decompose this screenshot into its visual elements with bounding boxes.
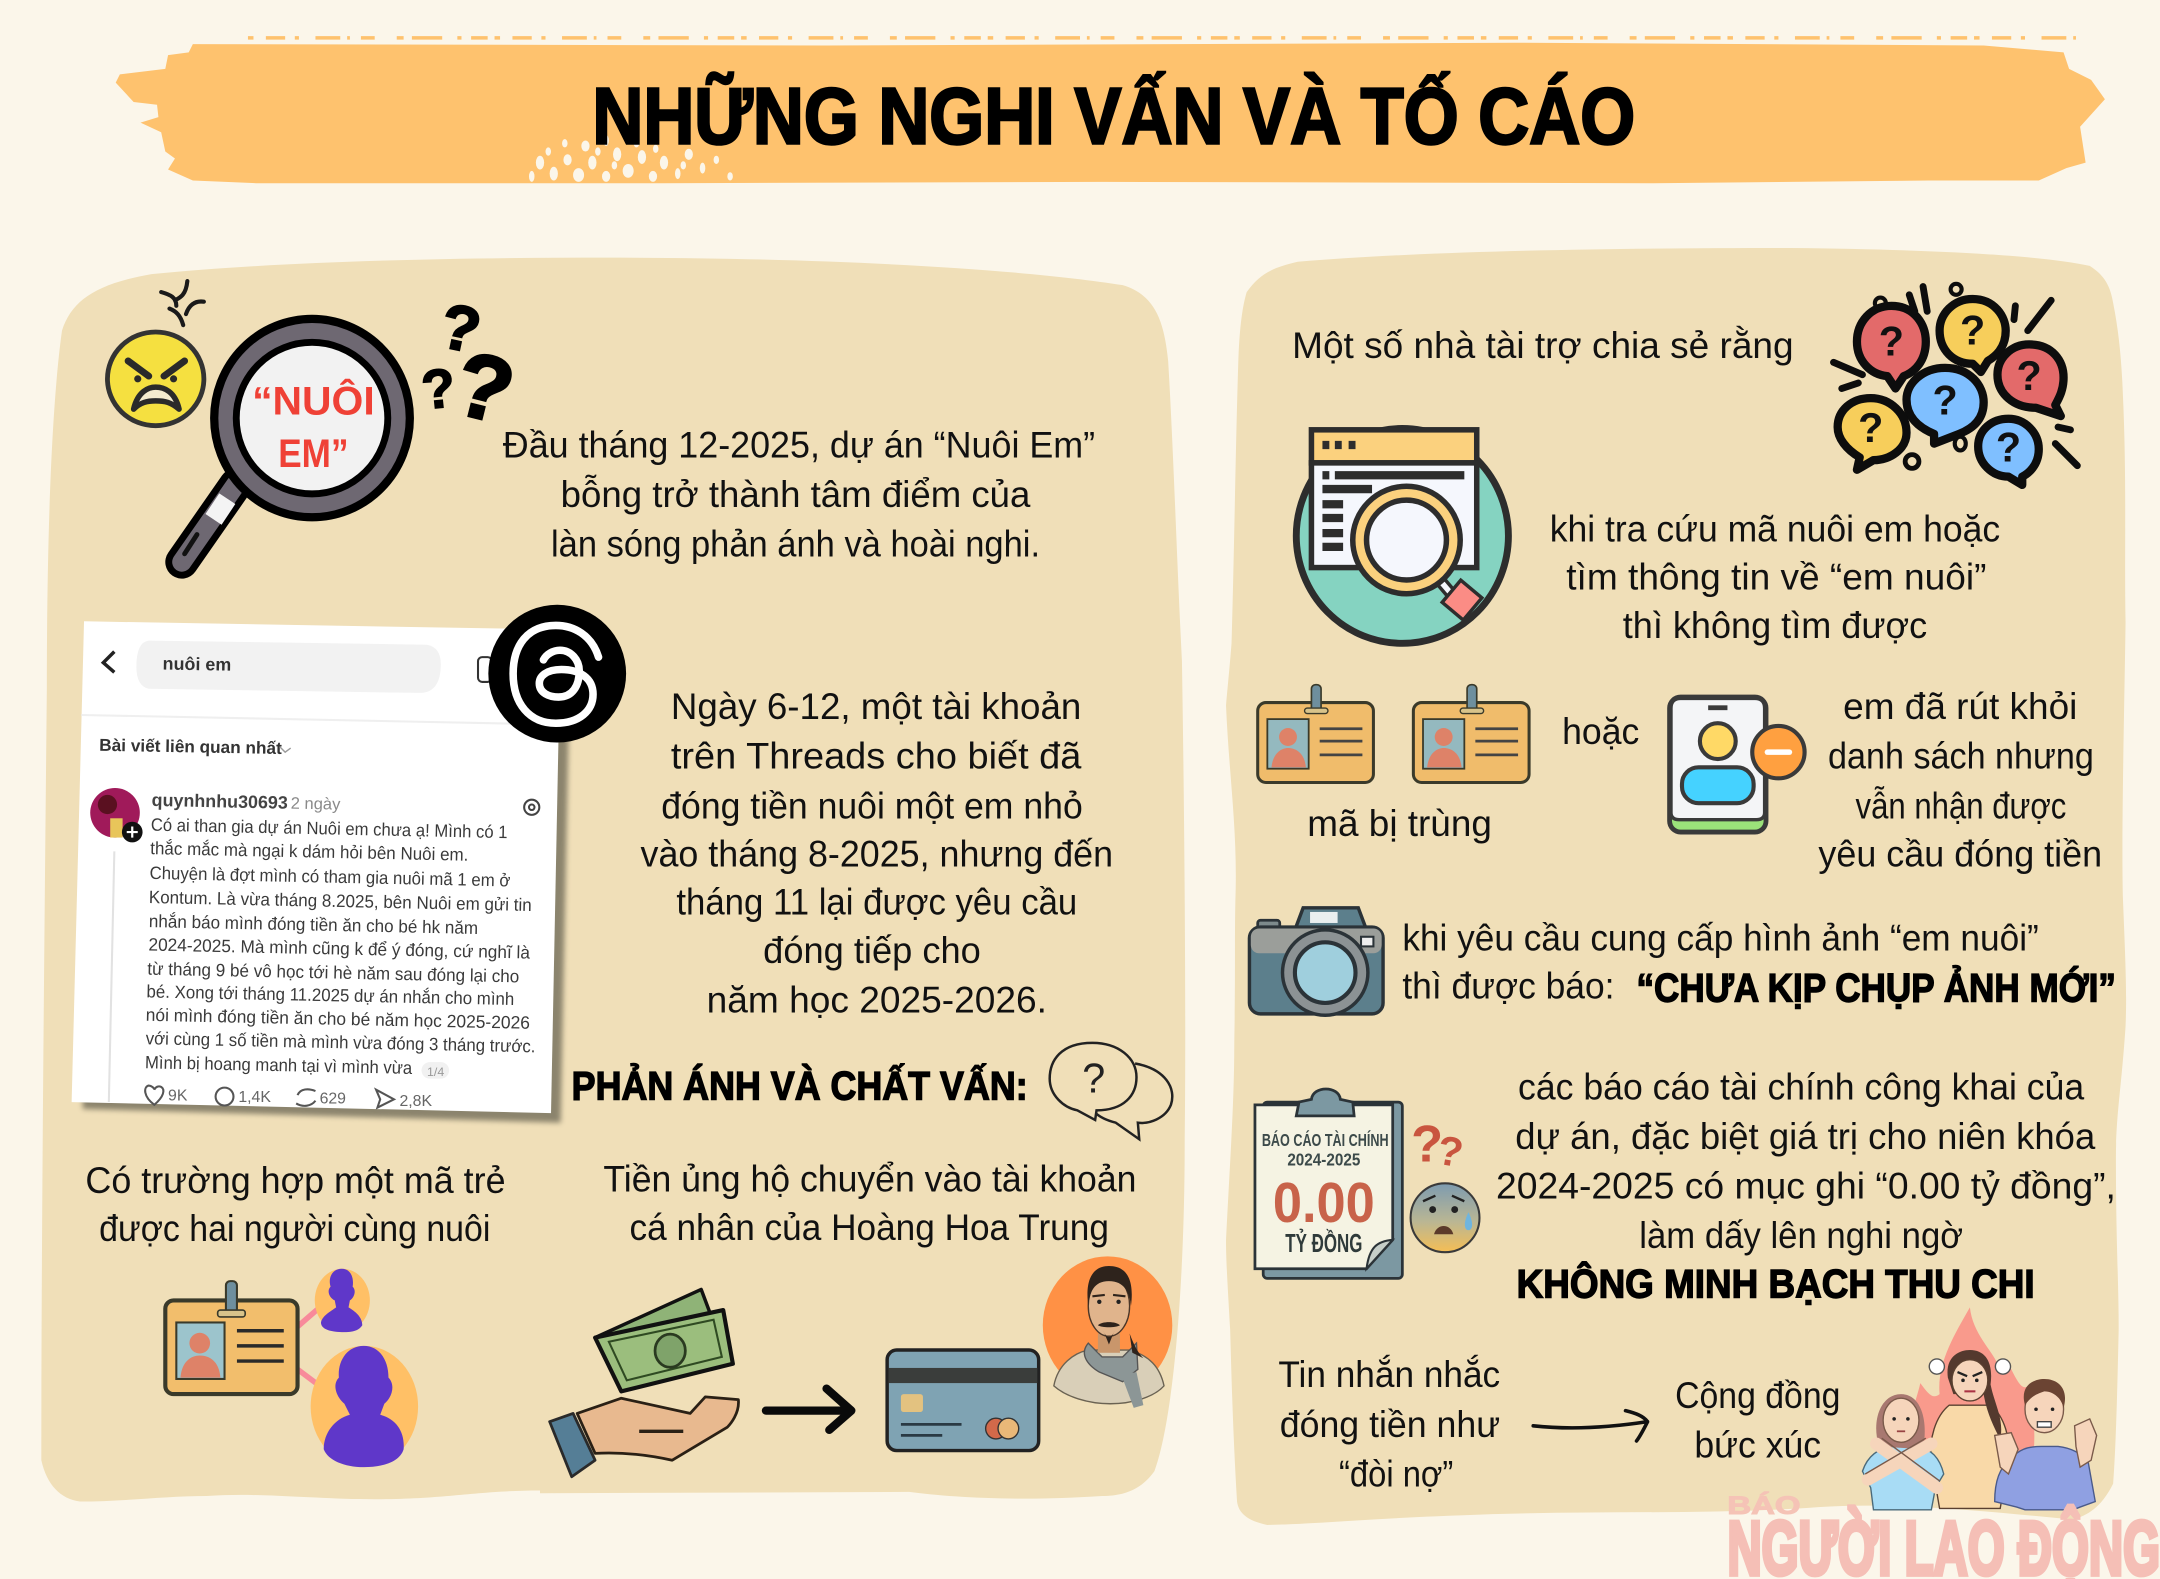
icon: id card two bbox=[1413, 685, 1529, 782]
text: duplicate code: mã bị trùng bbox=[1307, 802, 1492, 844]
bubble question marks and sparks: ? bbox=[1858, 405, 1883, 451]
icon: red question marks: ? bbox=[1434, 1127, 1467, 1176]
icon: question marks: ? bbox=[445, 333, 523, 444]
post text: bé. Xong tới tháng 11.2025 dự án nhắn cho mình bbox=[146, 980, 515, 1009]
post text: Chuyện là đợt mình có tham gia nuôi mã 1 em ở bbox=[149, 863, 511, 890]
text block: reminder messages: đóng tiền như bbox=[1280, 1403, 1500, 1445]
icon: financial report bbox=[1255, 1089, 1402, 1278]
text block: intro: bỗng trở thành tâm điểm của bbox=[561, 473, 1031, 515]
text block: personal account: cá nhân của Hoàng Hoa Trung bbox=[630, 1206, 1109, 1248]
post stats: 629 bbox=[320, 1090, 346, 1107]
text block: financial reports: dự án, đặc biệt giá trị cho niên khóa bbox=[1515, 1115, 2096, 1157]
text block: intro bbox=[503, 423, 1095, 565]
text: or: hoặc bbox=[1562, 710, 1639, 752]
icon: search window bbox=[1296, 428, 1508, 643]
post text: thắc mắc mà ngại k dám hỏi bên Nuôi em. bbox=[150, 837, 469, 865]
heading: complaints: PHẢN ÁNH VÀ CHẤT VẤN: bbox=[572, 1062, 1028, 1108]
text block: reminder messages: Tin nhắn nhắc bbox=[1278, 1353, 1500, 1395]
icon: magnifying glass bbox=[182, 319, 410, 562]
post stats: 9K bbox=[168, 1088, 188, 1105]
panel: right bbox=[1226, 248, 2126, 1525]
text block: duplicate code: được hai người cùng nuôi bbox=[99, 1207, 490, 1249]
screenshot: threads post: Bài viết liên quan nhất bbox=[99, 735, 282, 758]
icon: id card with two sponsors bbox=[165, 1269, 418, 1467]
text block: intro: làn sóng phản ánh và hoài nghi. bbox=[551, 523, 1040, 565]
post text: 2024-2025. Mà mình cũng k để ý đóng, cứ nghĩ là bbox=[148, 935, 530, 963]
icon: worried face bbox=[1411, 1183, 1479, 1252]
bubble question marks and sparks: ? bbox=[2017, 353, 2042, 399]
report text: BÁO CÁO TÀI CHÍNH bbox=[1262, 1129, 1389, 1150]
post text: Mình bị hoang manh tại vì mình vừa bbox=[145, 1052, 412, 1078]
text block: financial reports: KHÔNG MINH BẠCH THU CHI bbox=[1517, 1261, 2035, 1307]
text block: lookup fails bbox=[1550, 507, 2000, 646]
magnifier label bbox=[252, 378, 375, 476]
post text: Có ai than gia dự án Nuôi em chưa ạ! Mình có 1 bbox=[151, 815, 508, 842]
text block: threads account: năm học 2025-2026. bbox=[707, 979, 1047, 1021]
text: sponsors share: Một số nhà tài trợ chia sẻ rằng bbox=[1292, 324, 1794, 366]
icon: angry face bbox=[107, 281, 204, 426]
text block: withdrawn: vẫn nhận được bbox=[1856, 784, 2066, 826]
center woman bbox=[1929, 1350, 2011, 1508]
icon: question marks: ? bbox=[434, 291, 487, 367]
watermark: BÁO bbox=[1727, 1492, 1800, 1520]
post text: với cùng 1 số tiền mà mình vừa đóng 3 tháng trước. bbox=[146, 1028, 536, 1056]
screenshot: threads post: nuôi em bbox=[162, 654, 231, 675]
text block: withdrawn: danh sách nhưng bbox=[1828, 735, 2094, 777]
heading: NHỮNG NGHI VẤN VÀ TỐ CÁO bbox=[592, 71, 1635, 160]
icon: red question marks: ? bbox=[1411, 1115, 1443, 1173]
text block: photo request: khi yêu cầu cung cấp hình ảnh “em nuôi” bbox=[1402, 917, 2039, 959]
icon: threads logo bbox=[488, 605, 626, 743]
text block: lookup fails: thì không tìm được bbox=[1623, 604, 1927, 646]
text block: reminder messages: “đòi nợ” bbox=[1339, 1452, 1453, 1494]
text block: financial reports: các báo cáo tài chính công khai của bbox=[1518, 1065, 2085, 1107]
bubble question marks and sparks bbox=[1834, 284, 2077, 471]
left woman bbox=[1862, 1394, 1944, 1510]
text block: financial reports: 2024-2025 có mục ghi “0.00 tỷ đồng”, bbox=[1496, 1164, 2116, 1206]
post stats: 1,4K bbox=[238, 1089, 271, 1106]
report text bbox=[1262, 1129, 1389, 1258]
bubble question marks and sparks: ? bbox=[1960, 307, 1985, 353]
text block: threads account: tháng 11 lại được yêu cầu bbox=[676, 881, 1077, 923]
text block: lookup fails: khi tra cứu mã nuôi em hoặc bbox=[1550, 507, 2000, 549]
icon: question marks bbox=[418, 291, 523, 444]
bubble question marks and sparks: ? bbox=[1996, 425, 2021, 471]
post text: nói mình đóng tiền ăn cho bé năm học 2025-2026 bbox=[146, 1005, 530, 1033]
text block: photo request: thì được báo: bbox=[1402, 965, 1614, 1007]
icon: red question marks bbox=[1411, 1115, 1467, 1176]
report text: TỶ ĐỒNG bbox=[1285, 1228, 1362, 1258]
icon: hand with money bbox=[550, 1289, 739, 1477]
report text: 2024-2025 bbox=[1287, 1149, 1361, 1169]
text block: photo request bbox=[1402, 917, 2116, 1011]
text block: financial reports bbox=[1496, 1065, 2116, 1307]
text block: reminder messages bbox=[1278, 1353, 1500, 1494]
text block: duplicate code: Có trường hợp một mã trẻ bbox=[85, 1159, 506, 1201]
illustration: angry people bbox=[1862, 1307, 2097, 1510]
text block: withdrawn: em đã rút khỏi bbox=[1843, 685, 2077, 727]
text: community upset bbox=[1675, 1374, 1840, 1465]
screenshot: threads post bbox=[72, 621, 570, 1123]
text block: lookup fails: tìm thông tin về “em nuôi” bbox=[1566, 556, 1986, 598]
icon: speech bubbles: ? bbox=[1082, 1055, 1105, 1101]
post stats bbox=[145, 1086, 432, 1110]
text block: threads account: trên Threads cho biết đã bbox=[671, 735, 1082, 777]
icon: phone removing contact bbox=[1670, 697, 1805, 832]
text block: threads account: Ngày 6-12, một tài khoản bbox=[671, 685, 1081, 727]
icon: camera bbox=[1249, 908, 1383, 1015]
bubble question marks and sparks: ? bbox=[1879, 318, 1904, 364]
icon: question bubbles bbox=[1838, 299, 2064, 485]
text block: withdrawn bbox=[1818, 685, 2102, 875]
post stats: 2,8K bbox=[399, 1093, 432, 1110]
screenshot: threads post: 2 ngày bbox=[291, 794, 341, 814]
text: community upset: bức xúc bbox=[1694, 1423, 1821, 1465]
icon: id card one bbox=[1258, 685, 1373, 782]
text: community upset: Cộng đồng bbox=[1675, 1374, 1840, 1416]
post text: nhắn báo mình đóng tiền ăn cho bé hk năm bbox=[149, 910, 478, 938]
arrow: money to account bbox=[766, 1389, 851, 1430]
icon: bank card bbox=[887, 1350, 1039, 1451]
portrait: Hoàng Hoa Trung bbox=[1043, 1256, 1172, 1408]
title banner bbox=[116, 38, 2105, 183]
text block: withdrawn: yêu cầu đóng tiền bbox=[1818, 833, 2102, 875]
panel: left bbox=[41, 258, 1185, 1502]
magnifier label: “NUÔI bbox=[252, 378, 375, 424]
text block: financial reports: làm dấy lên nghi ngờ bbox=[1639, 1214, 1963, 1256]
text block: duplicate code bbox=[85, 1159, 506, 1249]
right man bbox=[1995, 1379, 2097, 1510]
screenshot: threads post: quynhnhu30693 bbox=[151, 790, 288, 813]
arrow: reminders to outrage bbox=[1533, 1411, 1648, 1441]
report text: 0.00 bbox=[1273, 1171, 1375, 1234]
post text: Kontum. Là vừa tháng 8.2025, bên Nuôi em gửi tin bbox=[149, 887, 532, 915]
magnifier label: EM” bbox=[278, 432, 349, 476]
post text bbox=[145, 815, 536, 1079]
text block: threads account: đóng tiền nuôi một em nhỏ bbox=[661, 784, 1083, 826]
text block: intro: Đầu tháng 12-2025, dự án “Nuôi Em” bbox=[503, 423, 1095, 465]
icon: speech bubbles bbox=[1050, 1043, 1172, 1139]
text block: threads account: đóng tiếp cho bbox=[763, 929, 981, 971]
post text: từ tháng 9 bé vô học tới hè năm sau đóng lại cho bbox=[147, 959, 519, 986]
text block: personal account: Tiền ủng hộ chuyển vào tài khoản bbox=[603, 1158, 1136, 1200]
text block: threads account: vào tháng 8-2025, nhưng đến bbox=[641, 833, 1113, 875]
icon: question marks: ? bbox=[418, 356, 458, 421]
bubble question marks and sparks: ? bbox=[1932, 378, 1958, 424]
text block: personal account bbox=[603, 1158, 1136, 1248]
post text: 1/4 bbox=[427, 1065, 444, 1079]
text block: threads account bbox=[641, 685, 1113, 1021]
